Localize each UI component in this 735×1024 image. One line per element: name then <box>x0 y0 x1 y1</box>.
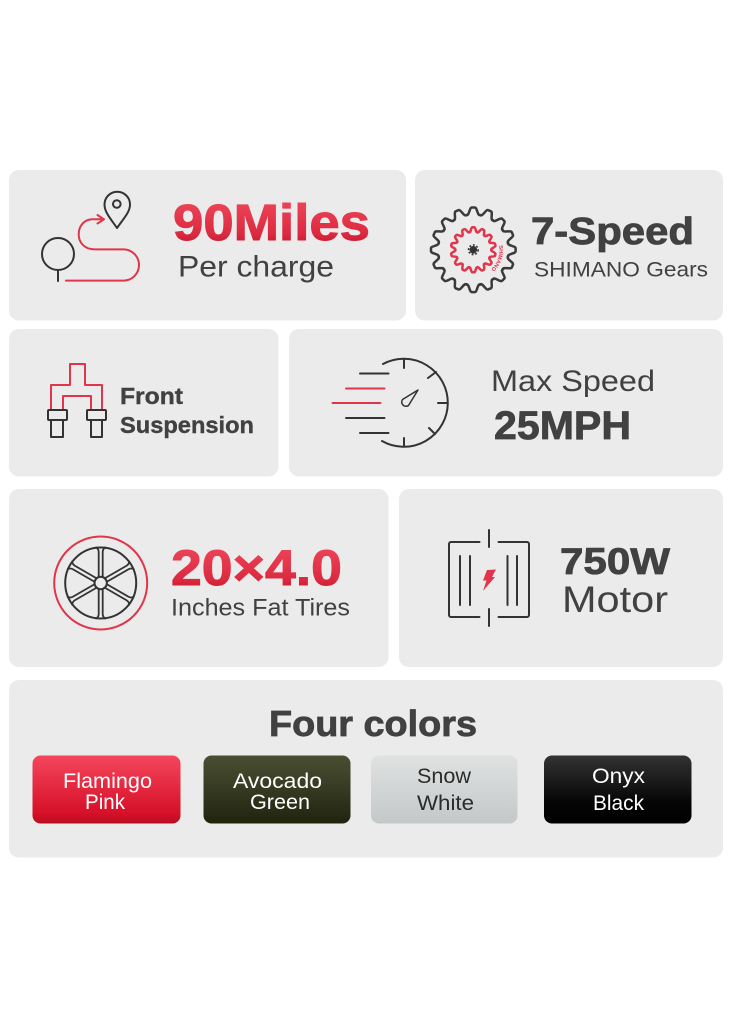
icon: suspension fork <box>48 364 106 437</box>
swatch: flamingo pink: Pink <box>85 790 125 814</box>
panel: 7-speed gears <box>415 170 723 320</box>
swatch: snow white <box>371 756 518 824</box>
swatch: snow white: Snow <box>417 764 471 788</box>
icon: route with pin <box>42 192 139 281</box>
icon: speedometer <box>332 359 448 447</box>
heading: 90Miles: 90Miles <box>173 194 370 251</box>
text: max speed: Max Speed <box>491 365 655 398</box>
swatch: snow white: White <box>417 791 474 815</box>
heading: 7-Speed: 7-Speed <box>531 211 694 253</box>
text: front suspension: Front <box>120 383 183 409</box>
panel: 90 miles range <box>9 170 406 320</box>
text: per charge: Per charge <box>178 250 334 284</box>
swatch: flamingo pink: Flamingo <box>63 769 152 793</box>
swatch: flamingo pink <box>32 756 180 824</box>
panel: four colors <box>9 680 723 858</box>
swatch: onyx black <box>544 756 692 824</box>
swatch: onyx black: Onyx <box>592 764 645 788</box>
icon: motor <box>449 530 529 626</box>
heading: four colors: Four colors <box>269 703 477 744</box>
panel: fat tires <box>9 489 388 667</box>
panel: max speed <box>289 329 723 476</box>
text: front suspension <box>120 383 254 438</box>
heading: 750W: 750W <box>560 541 670 582</box>
heading: 25MPH: 25MPH <box>494 404 631 448</box>
text: front suspension: Suspension <box>120 412 254 438</box>
heading: 20x4.0: 20×4.0 <box>171 540 342 596</box>
swatch: avocado green: Avocado <box>233 769 322 793</box>
swatch: onyx black: Black <box>593 791 644 815</box>
text: motor: Motor <box>562 579 668 620</box>
panel: front suspension <box>9 329 278 476</box>
panel: motor <box>399 489 723 667</box>
icon: gear <box>430 206 517 294</box>
swatch: avocado green <box>204 756 350 824</box>
icon: gear: SHIMANO <box>492 246 504 271</box>
swatch: avocado green: Green <box>250 790 310 814</box>
icon: wheel <box>54 536 147 630</box>
text: inches fat tires: Inches Fat Tires <box>171 594 350 622</box>
text: Shimano gears: SHIMANO Gears <box>534 258 708 282</box>
